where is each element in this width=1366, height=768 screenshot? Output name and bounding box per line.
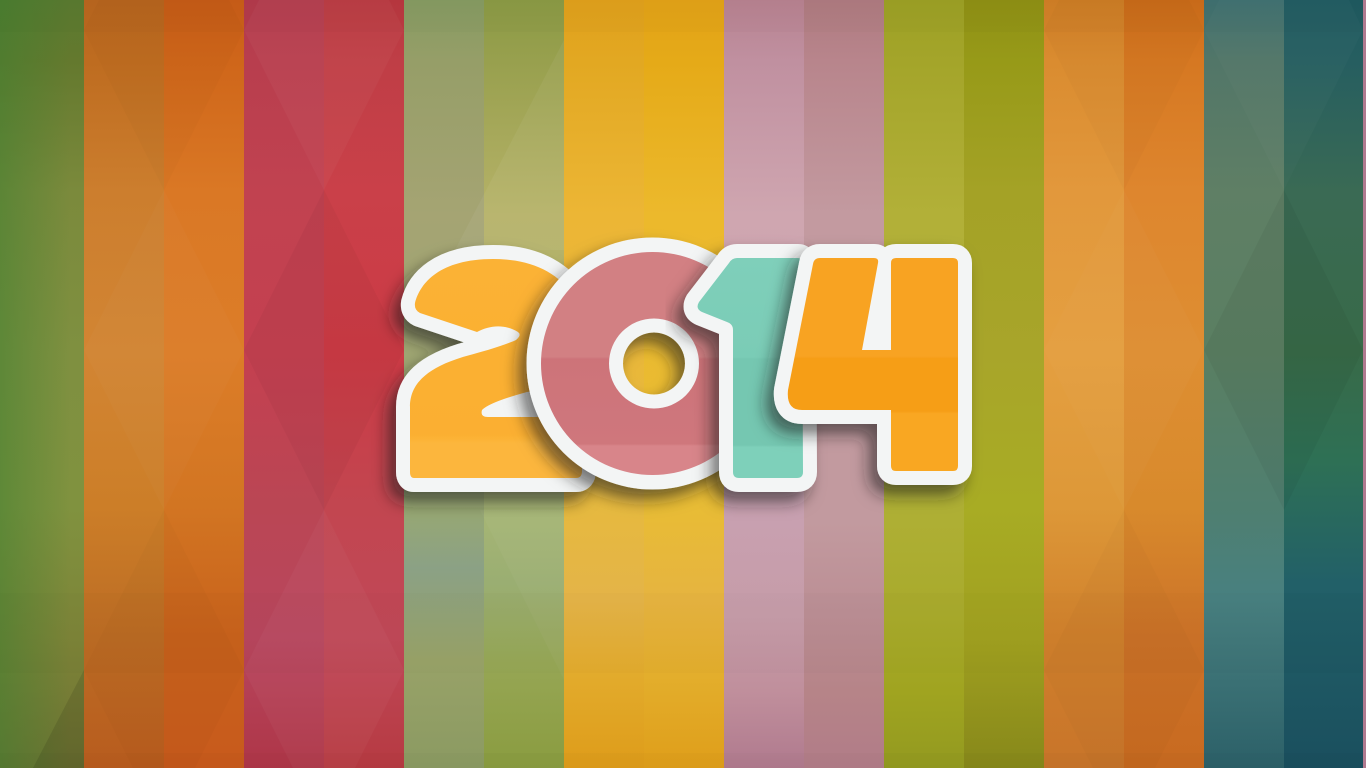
digit 0 (rose ring) xyxy=(526,238,778,490)
title numeral: 2014 xyxy=(410,238,958,490)
digit 2 (amber) xyxy=(410,259,582,478)
digit 4 (orange) xyxy=(788,258,958,471)
digit 1 (mint) xyxy=(698,258,803,478)
